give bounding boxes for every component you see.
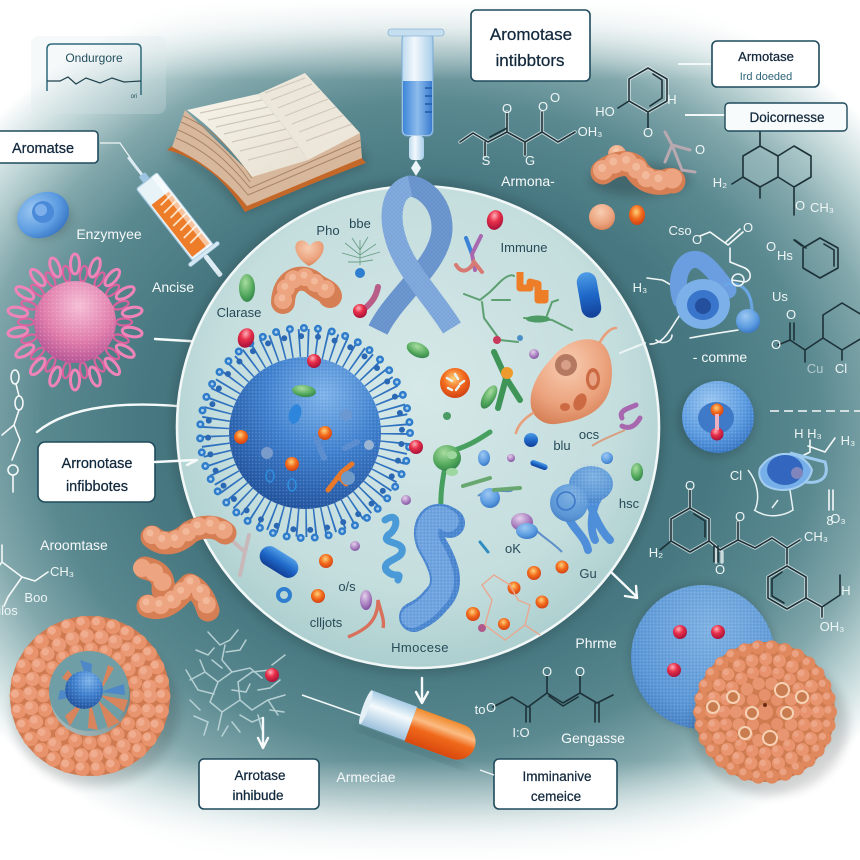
confetti ball — [440, 368, 470, 398]
big blue bean — [412, 517, 450, 617]
dark blue capsule — [256, 542, 302, 582]
Y linker — [228, 535, 249, 575]
molecule: central right chain: H — [841, 583, 851, 598]
molecule: central right chain: CH₃ — [804, 529, 828, 544]
icon: blue cell — [9, 183, 77, 247]
purple dot — [401, 495, 411, 505]
label: Arrotase inhibude: inhibude — [232, 788, 284, 803]
molecule: bottom chain — [475, 664, 613, 740]
orange balls upper right — [589, 204, 645, 230]
icon: angled syringe — [100, 143, 236, 288]
caption: Ancise: Ancise — [152, 279, 194, 295]
text: Clarase: Clarase — [217, 305, 261, 320]
molecule text right stack: O₃ — [830, 511, 846, 526]
caption: Enzymyee: Enzymyee — [76, 226, 142, 242]
molecule: bottom chain: O — [542, 664, 552, 679]
arrow: pink virus to circle — [155, 339, 212, 347]
icon: blue eye — [748, 453, 826, 516]
magenta pill — [485, 208, 505, 232]
text: H3: H₃ — [633, 280, 647, 295]
label: Aromatse: Aromatse — [12, 141, 74, 157]
label: Armotase Ird doeded: Armotase — [738, 49, 794, 64]
capsule — [354, 689, 481, 770]
faint text: gummnn — [387, 802, 429, 814]
Y-shaped antibody — [456, 236, 482, 272]
molecule: fused rings: Hs — [777, 248, 793, 263]
label: Imminanive cemeice — [480, 759, 617, 809]
arrow: circle down — [416, 678, 428, 703]
label: Armotase Ird doeded: Ird doeded — [740, 71, 792, 83]
molecule: right chlorophenyl: Cl — [835, 361, 847, 376]
molecule: hexagon with HO: O — [643, 125, 653, 140]
molecule: right chlorophenyl: O — [786, 307, 796, 322]
molecule text right stack: 8 — [826, 513, 834, 528]
label: Armotase Ird doeded — [678, 41, 819, 87]
main circle — [172, 181, 664, 673]
label: Arronotase infibbotes — [38, 442, 155, 502]
text: ok: oK — [505, 541, 521, 556]
molecule: top chain: OH₃ — [578, 124, 602, 139]
green capsule — [239, 274, 255, 302]
blue coil — [385, 517, 402, 580]
label: Arronotase infibbotes: Arronotase — [62, 456, 132, 472]
molecule: central right chain: O — [715, 562, 725, 577]
molecule: hexagon with HO: HO — [595, 104, 615, 119]
molecule: top right small: H H₃ — [794, 426, 822, 441]
molecule: right chlorophenyl — [771, 289, 860, 376]
blue spiky virus — [200, 328, 410, 538]
tree icon — [342, 237, 380, 278]
left lower molecule: Boo — [24, 590, 48, 605]
text: blu: blu — [553, 438, 571, 453]
left molecule — [2, 370, 23, 492]
molecule: central right chain: O — [685, 478, 695, 493]
molecule: central right chain: OH₃ — [820, 619, 844, 634]
molecule: hexagon lower right — [795, 238, 838, 278]
label: Arrotase inhibude: Arrotase — [234, 768, 286, 783]
molecule: central right chain: O — [735, 509, 745, 524]
dashed divider — [770, 410, 860, 412]
caption: Gengasse: Gengasse — [561, 730, 625, 746]
left lower molecule: CH₃ — [50, 564, 74, 579]
label: Aromatse — [0, 131, 98, 163]
molecule: chain near swirl: Cso — [668, 223, 692, 238]
molecule: chain near swirl — [668, 220, 753, 282]
heart blob — [295, 240, 324, 266]
molecule: top chain: O — [538, 99, 548, 114]
green figure — [443, 352, 520, 420]
molecule: bottom chain: O — [486, 700, 496, 715]
left lower molecule — [0, 545, 74, 618]
caption: Phrme: Phrme — [575, 635, 617, 651]
molecule: fused rings: O — [766, 239, 776, 254]
molecule: central right chain — [649, 478, 851, 634]
icon: blue swirl — [647, 259, 760, 344]
icon: pink virus — [7, 254, 143, 390]
blue ball — [631, 585, 775, 729]
text: Pho bbe: Pho — [316, 223, 340, 238]
molecule: fused rings — [713, 132, 834, 263]
small red ball — [409, 440, 423, 454]
text: ocs: ocs — [579, 427, 600, 442]
panel: onset chart label — [31, 36, 166, 114]
text: Hmocese: Hmocese — [391, 640, 449, 655]
blue snail — [550, 462, 613, 550]
label: Aromotase intibbtors: Aromotase — [490, 25, 572, 44]
orange hexagon lines — [482, 575, 540, 640]
molecule: top right small: H₃ — [841, 433, 855, 448]
icon: network — [186, 630, 285, 736]
molecule: right chlorophenyl: O — [771, 337, 781, 352]
magenta organelle — [348, 590, 383, 637]
blue-purple organelle — [463, 478, 562, 552]
label: Doicornesse — [685, 103, 847, 131]
label: Imminanive cemeice: Imminanive — [522, 769, 592, 784]
text: bbe: bbe — [349, 216, 371, 231]
orange bead chain upper right — [590, 145, 690, 196]
text: oh: o/s — [338, 579, 356, 594]
grey linker: O — [695, 142, 705, 157]
molecule: fused rings: H₂ — [713, 175, 727, 190]
icon: top syringe — [388, 29, 444, 176]
molecule text right stack — [826, 490, 846, 528]
label: Imminanive cemeice: cemeice — [531, 789, 581, 804]
molecule: bottom chain: O — [575, 664, 585, 679]
text: Immune: Immune — [501, 240, 547, 255]
molecule: central right chain: H₂ — [649, 545, 663, 560]
molecule: chain near swirl: O — [692, 232, 702, 247]
arrow: curved to circle — [37, 405, 197, 432]
orange ring cell — [11, 621, 179, 786]
text: hsc: hsc — [619, 496, 640, 511]
caption: Aroomtase: Aroomtase — [40, 537, 108, 553]
molecule: bottom chain: I:O — [512, 725, 530, 740]
molecule: top chain: G — [525, 153, 535, 168]
molecule: fused rings: CH₃ — [810, 200, 834, 215]
label: Aromotase intibbtors: intibbtors — [496, 51, 564, 70]
arrow: label to circle — [155, 460, 197, 465]
blue ribbon — [378, 186, 452, 330]
connector from cell — [620, 343, 645, 353]
red ball on network — [265, 668, 279, 682]
caption: comme: - comme — [693, 349, 747, 365]
orange balls inside — [311, 554, 568, 632]
orange zigzag — [520, 272, 545, 300]
molecule: right chlorophenyl: Cu — [807, 361, 823, 376]
orange beads: lower-left chain — [142, 523, 225, 610]
red pill — [235, 326, 257, 350]
icon: open book — [167, 73, 366, 212]
orange cluster — [692, 642, 848, 795]
green molecules — [464, 275, 572, 344]
green organelle — [433, 432, 490, 510]
purple squiggle — [621, 405, 640, 427]
caption: Armeciae: Armeciae — [336, 769, 396, 785]
small blue bits — [478, 430, 643, 481]
blue capsule — [575, 271, 603, 319]
molecule: top chain — [460, 90, 602, 168]
text: CH: Cl — [730, 468, 742, 483]
orange cell — [516, 328, 616, 433]
molecule: hexagon with HO — [595, 68, 677, 140]
purple ball — [529, 349, 539, 359]
molecule: top right small — [790, 426, 855, 462]
text: Gu: Gu — [579, 566, 597, 581]
blue ring — [278, 589, 290, 601]
small purple — [350, 541, 360, 551]
label: Aromotase intibbtors — [471, 10, 590, 81]
molecule: chain near swirl: O — [743, 220, 753, 235]
molecule: fused rings: O — [795, 198, 805, 213]
label: Arrotase inhibude — [199, 759, 319, 809]
molecule: bottom chain: to — [475, 702, 485, 717]
molecule: top chain: O — [502, 101, 512, 116]
text: cllyols: clljots — [310, 615, 343, 630]
icon: blue ring — [678, 381, 754, 456]
caption: Armona-: Armona- — [501, 173, 555, 189]
molecule: top chain: S — [482, 153, 491, 168]
panel: onset chart label: ori — [131, 94, 137, 100]
arrow: network down — [258, 718, 268, 748]
label: Doicornesse: Doicornesse — [749, 110, 825, 125]
molecule: hexagon with HO: H — [667, 92, 677, 107]
grey linker — [665, 132, 705, 172]
label: Arronotase infibbotes: infibbotes — [66, 479, 128, 495]
green pill — [404, 339, 432, 361]
orange arch — [282, 275, 330, 302]
red stalk — [353, 287, 378, 318]
arrow: circle to blue ball — [611, 572, 637, 598]
panel: onset chart label: Ondurgore — [65, 51, 123, 65]
molecule: right chlorophenyl: Us — [772, 289, 788, 304]
connector line — [302, 695, 362, 716]
molecule: top chain: O — [550, 90, 560, 105]
